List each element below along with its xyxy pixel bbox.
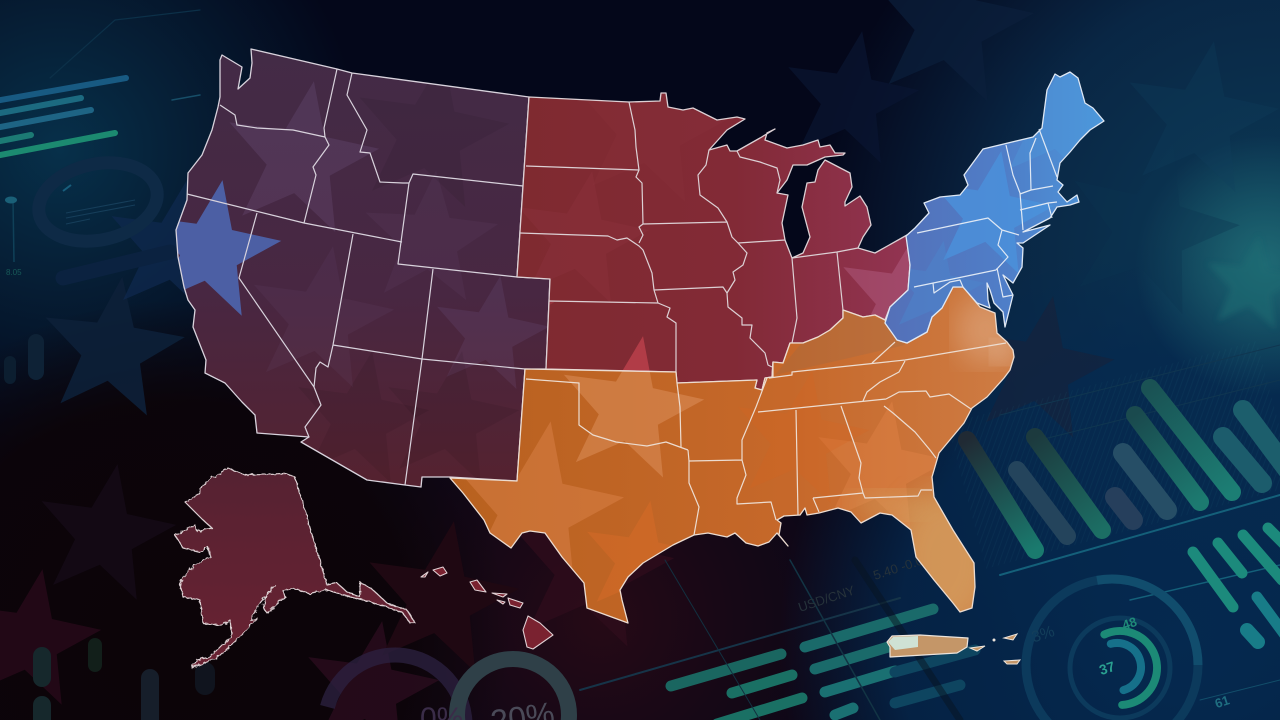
- translucent stars and highlights over South: [438, 295, 1015, 630]
- translucent stars over Midwest: [550, 248, 910, 371]
- chart: donut rings bottom right: 61: [1213, 692, 1231, 711]
- region: Puerto Rico: [887, 634, 1020, 664]
- chart: vertical pills lower-left: [10, 342, 205, 720]
- west outline: [176, 49, 550, 487]
- northeastern states fill: [885, 72, 1104, 343]
- midwest outline: [517, 93, 910, 390]
- translucent stars over West: [176, 82, 547, 418]
- northeastern state borders: [914, 129, 1057, 297]
- chart: horizontal bars top-left: [0, 10, 200, 156]
- region: Alaska: [175, 468, 415, 668]
- chart: horizontal bars bottom centre: 5.40 -0.001810: [871, 542, 959, 583]
- region: West: [175, 48, 550, 488]
- midwestern state borders: [520, 102, 858, 372]
- region: Northeast: [884, 71, 1105, 344]
- chart: donut rings bottom right: 37: [1097, 658, 1117, 678]
- chart: donut rings bottom right: [1012, 565, 1231, 720]
- midwestern states fill: [517, 93, 910, 390]
- chart: percent rings bottom: [309, 639, 569, 720]
- northeast outline: [885, 72, 1104, 343]
- chart: diagonal bar chart lower right: [947, 341, 1280, 700]
- chart: horizontal bars bottom centre: USD/CNY: [796, 582, 857, 615]
- chart: background ring top-left: [5, 152, 170, 278]
- region: Hawaii: [421, 567, 553, 649]
- chart: donut rings bottom right: 3%: [1030, 623, 1057, 646]
- western states fill: [176, 49, 550, 487]
- chart: background ring top-left: 8.05: [6, 268, 22, 277]
- southern states fill: [450, 287, 1014, 623]
- western state borders: [187, 69, 525, 485]
- translucent stars over Northeast: [900, 143, 1053, 324]
- chart: horizontal bars bottom centre: [580, 542, 975, 720]
- south outline: [450, 287, 1014, 623]
- chart: short diagonal bars right: [1193, 528, 1280, 642]
- region: South: [438, 287, 1015, 630]
- region: Midwest: [516, 92, 910, 390]
- chart: donut rings bottom right: 48: [1120, 614, 1139, 633]
- southern state borders: [526, 342, 1006, 535]
